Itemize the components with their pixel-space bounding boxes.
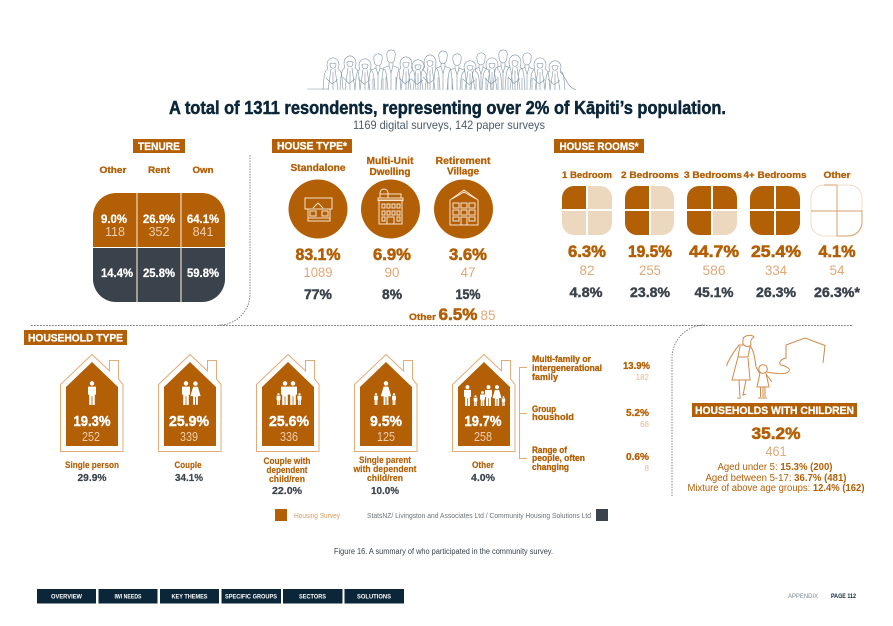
tenure table: housing survey row: 9.0% bbox=[101, 214, 127, 226]
tenure table: housing survey row: 841 bbox=[193, 225, 213, 239]
tenure column labels: Own bbox=[192, 165, 214, 176]
range of people breakdown: changing bbox=[532, 462, 569, 472]
tenure table: stats row: 25.8% bbox=[143, 268, 175, 280]
single parent house: 9.5% bbox=[370, 414, 402, 430]
2 bedrooms column: 255 bbox=[639, 262, 661, 278]
couple with dependent children house: 25.6% bbox=[269, 414, 309, 430]
single person house: 252 bbox=[82, 430, 100, 444]
other house type: 85 bbox=[480, 307, 496, 323]
single parent house: 125 bbox=[377, 430, 395, 444]
3 bedrooms column: 45.1% bbox=[694, 285, 734, 300]
4+ bedrooms column bbox=[744, 170, 806, 300]
other rooms column: 4.1% bbox=[818, 242, 856, 261]
panel: house type bbox=[272, 139, 496, 324]
tenure table: housing survey row bbox=[93, 193, 225, 247]
figure caption: Figure 16. A summary of who participated in the community survey. bbox=[334, 547, 553, 556]
page marker bbox=[788, 594, 857, 600]
households with children heading: HOUSEHOLDS WITH CHILDREN bbox=[695, 405, 854, 417]
navigation bar: IWI NEEDS bbox=[114, 594, 142, 600]
3 bedrooms column: 586 bbox=[702, 262, 726, 278]
retirement village column: Retirement bbox=[436, 156, 491, 167]
retirement village column: Village bbox=[447, 166, 479, 178]
navigation bar bbox=[37, 589, 404, 604]
other rooms column: Other bbox=[824, 170, 851, 181]
other household house: 258 bbox=[474, 430, 492, 444]
standalone column: Standalone bbox=[290, 163, 346, 174]
standalone column: 77% bbox=[304, 287, 332, 302]
couple house bbox=[158, 354, 221, 484]
legend: Housing Survey bbox=[294, 513, 340, 520]
retirement village column: 47 bbox=[460, 264, 476, 280]
couple with dependent children house: Couple with bbox=[264, 456, 310, 466]
household type heading: HOUSEHOLD TYPE bbox=[28, 332, 123, 344]
navigation bar: KEY THEMES bbox=[172, 594, 208, 600]
tenure heading: TENURE bbox=[138, 141, 180, 153]
4+ bedrooms column: 26.3% bbox=[756, 285, 796, 300]
single person house: 29.9% bbox=[78, 472, 107, 484]
navigation bar: OVERVIEW bbox=[51, 594, 82, 600]
tenure column labels: Other bbox=[100, 165, 127, 176]
1 bedroom column: 82 bbox=[580, 262, 595, 278]
single person house bbox=[60, 354, 123, 484]
1 bedroom column: 4.8% bbox=[570, 285, 602, 300]
navigation bar: SPECIFIC GROUPS bbox=[225, 594, 277, 600]
other household house: 4.0% bbox=[471, 472, 496, 484]
range of people breakdown: people, often bbox=[532, 453, 585, 463]
range of people breakdown bbox=[532, 445, 650, 473]
bracket: other household breakdown bbox=[520, 368, 527, 458]
navigation bar: SOLUTIONS bbox=[357, 594, 391, 600]
panel: house rooms bbox=[554, 139, 862, 300]
multi-family breakdown: Multi-family or bbox=[532, 354, 591, 364]
tenure table: housing survey row: 352 bbox=[149, 225, 169, 239]
tenure table: stats row bbox=[93, 193, 225, 302]
house type heading: HOUSE TYPE* bbox=[277, 140, 348, 152]
tenure table: stats row: 14.4% bbox=[101, 268, 133, 280]
age breakdown text: Mixture of above age groups: 12.4% (162) bbox=[688, 483, 864, 494]
4+ bedrooms column: 334 bbox=[765, 262, 787, 278]
single parent house: Single parent bbox=[359, 455, 411, 465]
subtitle: 1169 digital surveys, 142 paper surveys bbox=[353, 118, 545, 132]
legend bbox=[275, 509, 608, 521]
group household breakdown: houshold bbox=[532, 412, 574, 422]
multi-unit dwelling column: 90 bbox=[384, 264, 400, 280]
standalone column: 1089 bbox=[304, 264, 333, 280]
couple with dependent children house: dependent bbox=[266, 465, 308, 475]
multi-unit dwelling column: Multi-Unit bbox=[366, 156, 414, 167]
retirement village column: 3.6% bbox=[449, 245, 487, 264]
couple with dependent children house: 336 bbox=[280, 430, 298, 444]
couple house: 34.1% bbox=[175, 472, 204, 484]
multi-unit dwelling column: 6.9% bbox=[373, 245, 411, 264]
range of people breakdown: 0.6% bbox=[626, 451, 650, 463]
illustration: mother and child walking to a house bbox=[727, 335, 825, 398]
retirement village column: 15% bbox=[456, 287, 480, 302]
age breakdown text bbox=[688, 462, 864, 494]
tenure table: housing survey row: 26.9% bbox=[143, 214, 175, 226]
tenure column labels: Rent bbox=[148, 165, 171, 176]
1 bedroom column: 6.3% bbox=[568, 242, 606, 261]
title: A total of 1311 resondents, representing over 2% of Kāpiti’s population. bbox=[169, 97, 726, 118]
single parent house: child/ren bbox=[367, 473, 403, 483]
house rooms heading: HOUSE ROOMS* bbox=[560, 141, 639, 153]
3 bedrooms column bbox=[684, 170, 742, 300]
multi-family breakdown: 182 bbox=[636, 373, 650, 382]
2 bedrooms column: 2 Bedrooms bbox=[621, 170, 679, 181]
households with children count: 461 bbox=[766, 443, 787, 459]
3 bedrooms column: 44.7% bbox=[689, 242, 739, 261]
tenure table: stats row: 59.8% bbox=[187, 268, 219, 280]
group household breakdown: Group bbox=[532, 404, 556, 414]
panel: households with children bbox=[688, 335, 864, 494]
4+ bedrooms column: 25.4% bbox=[751, 242, 801, 261]
standalone column: 83.1% bbox=[296, 245, 340, 264]
other household house: Other bbox=[472, 460, 494, 470]
page marker: APPENDIX bbox=[788, 594, 818, 600]
other household house bbox=[452, 354, 515, 484]
other rooms column bbox=[811, 170, 862, 300]
tenure table: housing survey row: 64.1% bbox=[187, 214, 219, 226]
range of people breakdown: 8 bbox=[645, 464, 650, 473]
panel: household type bbox=[24, 330, 651, 497]
other house type: 6.5% bbox=[438, 305, 478, 324]
other house type bbox=[409, 305, 496, 324]
3 bedrooms column: 3 Bedrooms bbox=[684, 170, 742, 181]
other house type: Other bbox=[409, 312, 436, 323]
legend: StatsNZ/ Livingston and Associates Ltd / Community Housing Solutions Ltd bbox=[367, 513, 591, 520]
single person house: Single person bbox=[65, 460, 119, 470]
couple with dependent children house: child/ren bbox=[269, 474, 305, 484]
1 bedroom column bbox=[562, 170, 612, 300]
age breakdown text: Aged between 5-17: 36.7% (481) bbox=[706, 473, 846, 484]
couple with dependent children house bbox=[256, 354, 319, 497]
single parent house: 10.0% bbox=[371, 485, 400, 497]
2 bedrooms column: 19.5% bbox=[628, 242, 672, 261]
4+ bedrooms column: 4+ Bedrooms bbox=[744, 170, 806, 181]
1 bedroom column: 1 Bedroom bbox=[562, 170, 612, 181]
other household house: 19.7% bbox=[464, 414, 502, 430]
2 bedrooms column bbox=[621, 170, 679, 300]
navigation bar: SECTORS bbox=[299, 594, 326, 600]
group household breakdown: 68 bbox=[640, 420, 650, 429]
multi-unit dwelling column bbox=[361, 156, 420, 302]
multi-family breakdown: 13.9% bbox=[623, 360, 651, 372]
dotted divider: households with children bbox=[672, 325, 705, 496]
couple house: 339 bbox=[180, 430, 198, 444]
couple with dependent children house: 22.0% bbox=[272, 485, 303, 497]
multi-family breakdown bbox=[532, 354, 651, 382]
other rooms column: 26.3%* bbox=[814, 285, 861, 300]
dotted divider: top / bottom bbox=[31, 324, 852, 326]
other rooms column: 54 bbox=[830, 262, 845, 278]
multi-unit dwelling column: 8% bbox=[382, 287, 402, 302]
panel: tenure bbox=[93, 139, 225, 302]
group household breakdown: 5.2% bbox=[626, 407, 650, 419]
dotted divider: tenure / house type bbox=[219, 155, 250, 325]
retirement village column bbox=[434, 156, 493, 302]
single parent house bbox=[353, 354, 417, 497]
range of people breakdown: Range of bbox=[532, 445, 568, 455]
couple house: Couple bbox=[174, 460, 202, 470]
multi-unit dwelling column: Dwelling bbox=[370, 167, 410, 178]
2 bedrooms column: 23.8% bbox=[630, 285, 670, 300]
households with children total: 35.2% bbox=[752, 424, 800, 443]
single parent house: with dependent bbox=[353, 464, 416, 474]
page marker: PAGE 112 bbox=[831, 594, 857, 600]
multi-family breakdown: intergenerational bbox=[532, 363, 602, 373]
illustration: line drawing of a crowd of people bbox=[307, 50, 576, 90]
group household breakdown bbox=[532, 404, 650, 429]
couple house: 25.9% bbox=[169, 414, 209, 430]
tenure table: housing survey row: 118 bbox=[105, 225, 125, 239]
standalone column bbox=[288, 163, 348, 302]
multi-family breakdown: family bbox=[532, 372, 558, 382]
age breakdown text: Aged under 5: 15.3% (200) bbox=[718, 462, 832, 473]
single person house: 19.3% bbox=[74, 414, 111, 430]
tenure column labels bbox=[100, 165, 214, 176]
